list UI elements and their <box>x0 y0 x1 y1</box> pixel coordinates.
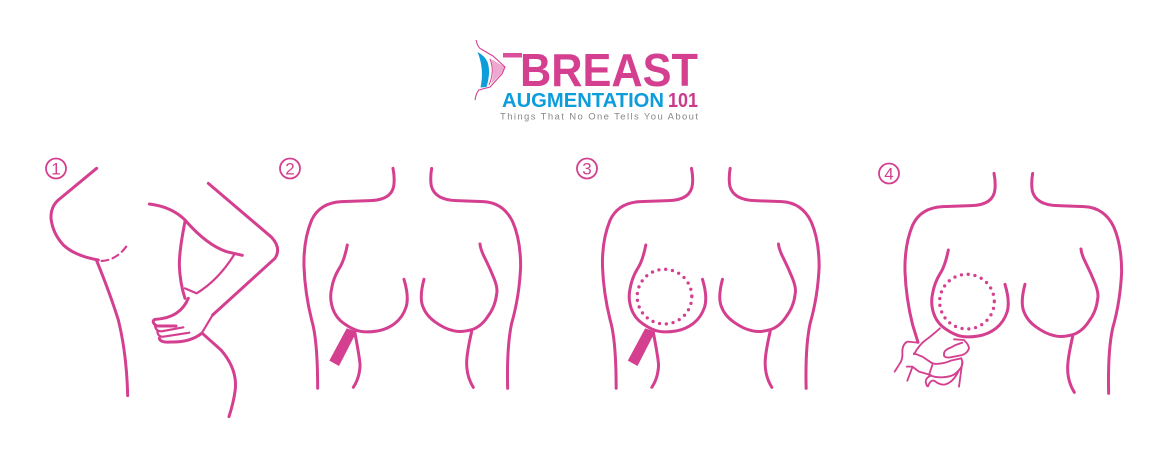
torso figure <box>304 168 521 388</box>
torso figure with implant and hand <box>895 173 1122 393</box>
step number 4: 4 <box>884 164 894 184</box>
step number 3: 3 <box>582 160 592 178</box>
panel: step 2 incision and insertion <box>280 158 521 388</box>
logo number: 101: 101 <box>668 90 698 112</box>
logo tagline: Things That No One Tells You About <box>500 112 698 122</box>
step number 1: 1 <box>51 160 61 178</box>
logo word: AUGMENTATION: AUGMENTATION <box>502 90 664 112</box>
panel: step 4 closing by hand <box>879 164 1122 393</box>
step number 3 <box>577 158 597 178</box>
logo bar joining the B <box>503 53 522 58</box>
icon: breast profile <box>475 40 505 100</box>
panel: step 1 side view <box>46 158 278 417</box>
icon: hand <box>895 328 969 387</box>
step number 2 <box>280 158 300 178</box>
dotted implant outline <box>637 269 692 324</box>
step number 1 <box>46 158 66 178</box>
logo <box>475 40 698 122</box>
torso figure with implant <box>602 168 819 388</box>
dotted implant outline <box>940 274 994 329</box>
step number 2: 2 <box>285 160 295 178</box>
side profile figure <box>51 168 278 417</box>
step number 4 <box>879 164 899 184</box>
panel: step 3 implant placed <box>577 158 819 388</box>
incision band <box>329 328 357 366</box>
logo word: BREAST: BREAST <box>520 44 698 96</box>
incision band <box>628 328 655 366</box>
